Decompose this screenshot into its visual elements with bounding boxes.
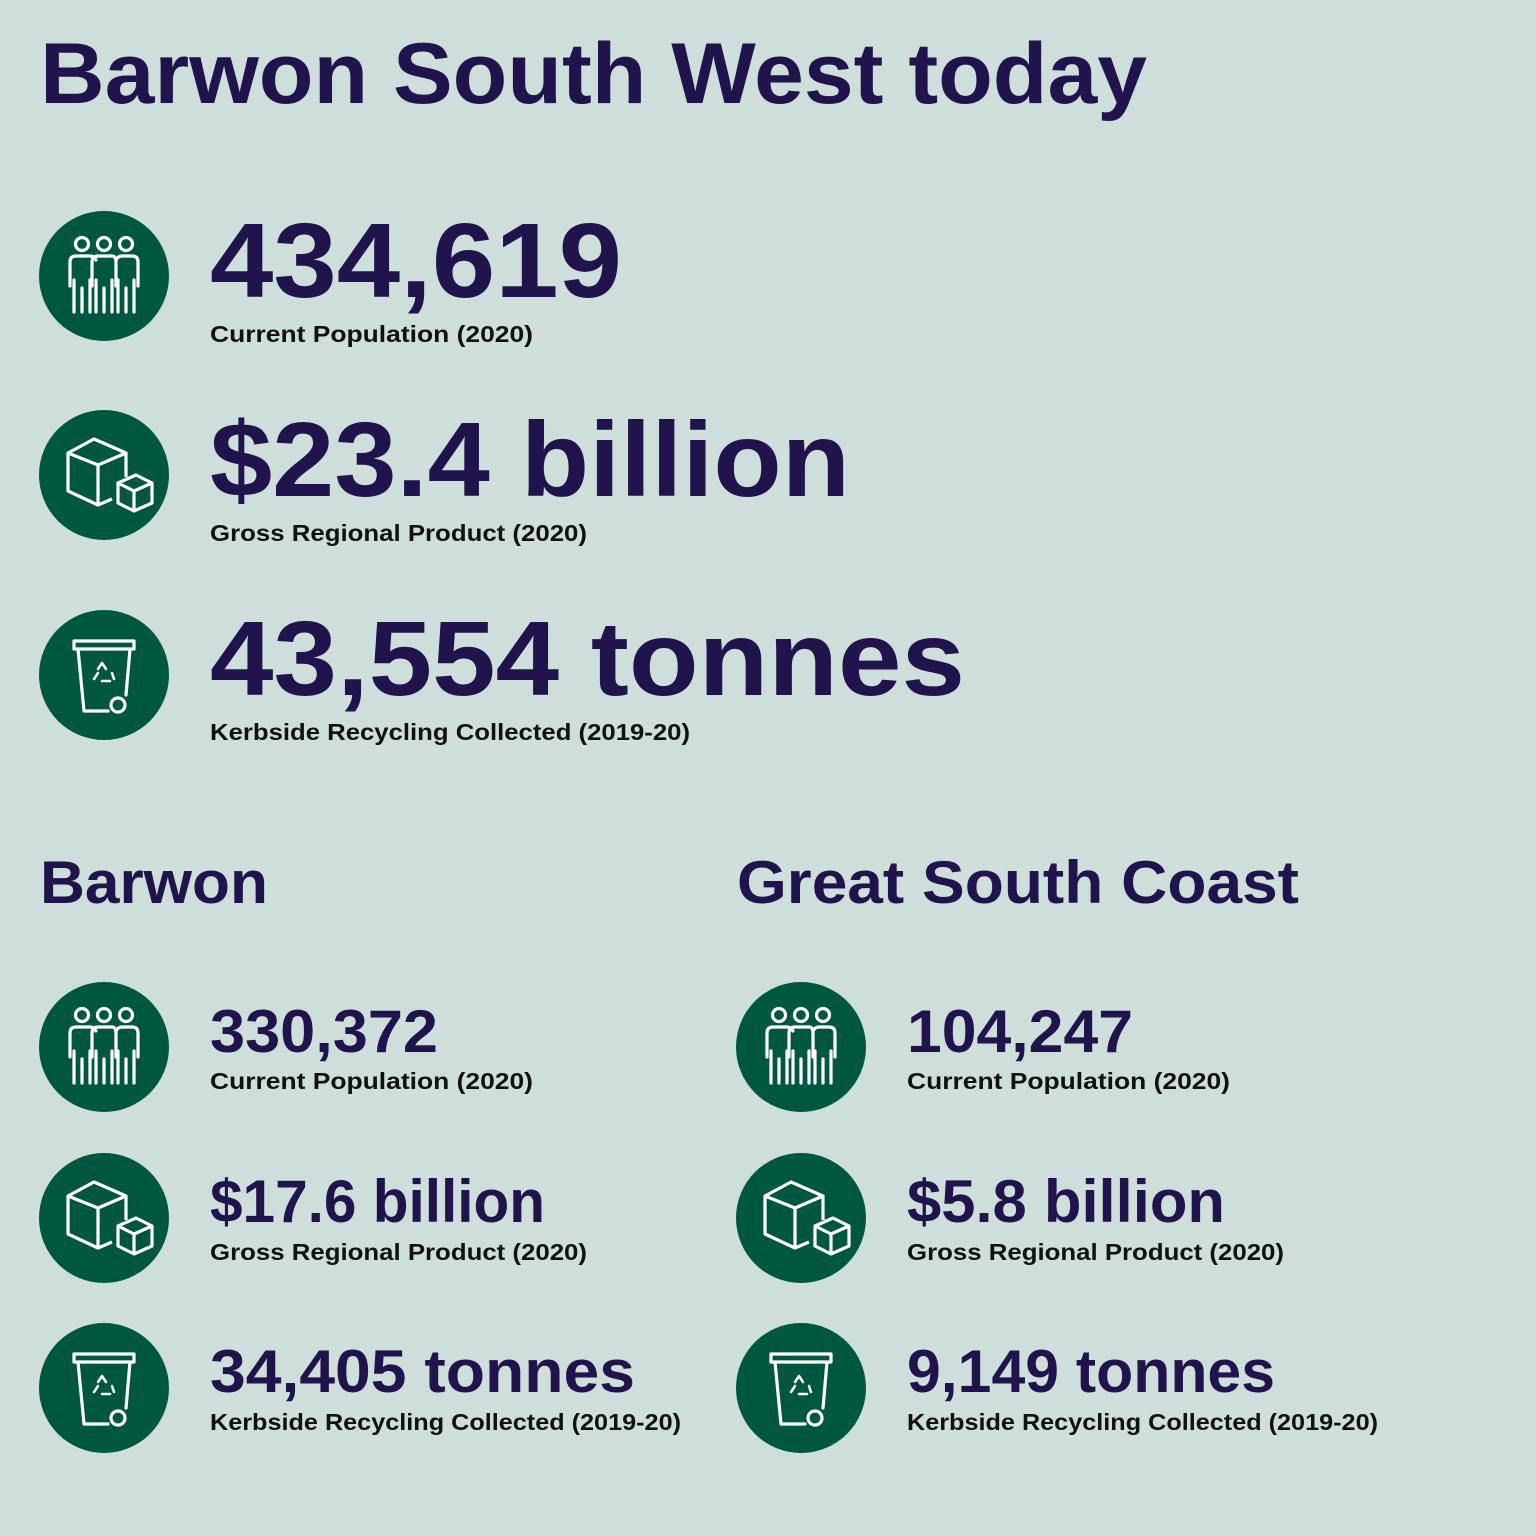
stat: recycling total: Kerbside Recycling Collected (2019-20): [210, 719, 690, 745]
stat: population total: 434,619: [210, 202, 622, 320]
stat: Barwon GRP: $17.6 billion: [210, 1168, 545, 1235]
stat: Barwon recycling: Kerbside Recycling Collected (2019-20): [210, 1409, 681, 1435]
stat: recycling total: 43,554 tonnes: [210, 600, 965, 718]
stat: Barwon GRP: Gross Regional Product (2020): [210, 1239, 587, 1265]
icon: people: [39, 211, 169, 341]
stat: GRP total: [39, 401, 850, 546]
stat: recycling total: [39, 600, 965, 745]
title: Barwon South West today: [40, 26, 1147, 122]
stat: Barwon recycling: 34,405 tonnes: [210, 1338, 635, 1405]
heading: Great South Coast: Great South Coast: [737, 849, 1299, 916]
stat: GRP total: $23.4 billion: [210, 401, 850, 519]
stat: GSC population: 104,247: [907, 998, 1133, 1065]
panel: Great South Coast stats: [736, 982, 1378, 1453]
stat: Barwon population: [39, 982, 533, 1112]
heading: Barwon: Barwon: [40, 849, 268, 916]
stat: GSC population: Current Population (2020): [907, 1068, 1230, 1094]
panel: Barwon stats: [39, 982, 681, 1453]
stat: GSC GRP: [736, 1153, 1284, 1283]
icon: bin: [39, 610, 169, 740]
stat: Barwon recycling: [39, 1323, 681, 1453]
icon: boxes: [39, 410, 169, 540]
stat: GSC population: [736, 982, 1230, 1112]
stat: GSC GRP: $5.8 billion: [907, 1168, 1225, 1235]
stat: population total: Current Population (2020): [210, 321, 533, 347]
stat: GRP total: Gross Regional Product (2020): [210, 520, 587, 546]
stat: GSC recycling: 9,149 tonnes: [907, 1338, 1275, 1405]
stat: population total: [39, 202, 622, 347]
stat: Barwon GRP: [39, 1153, 587, 1283]
stat: Barwon population: Current Population (2020): [210, 1068, 533, 1094]
stat: Barwon population: 330,372: [210, 998, 438, 1065]
stat: GSC recycling: [736, 1323, 1378, 1453]
stat: GSC GRP: Gross Regional Product (2020): [907, 1239, 1284, 1265]
stat: GSC recycling: Kerbside Recycling Collected (2019-20): [907, 1409, 1378, 1435]
